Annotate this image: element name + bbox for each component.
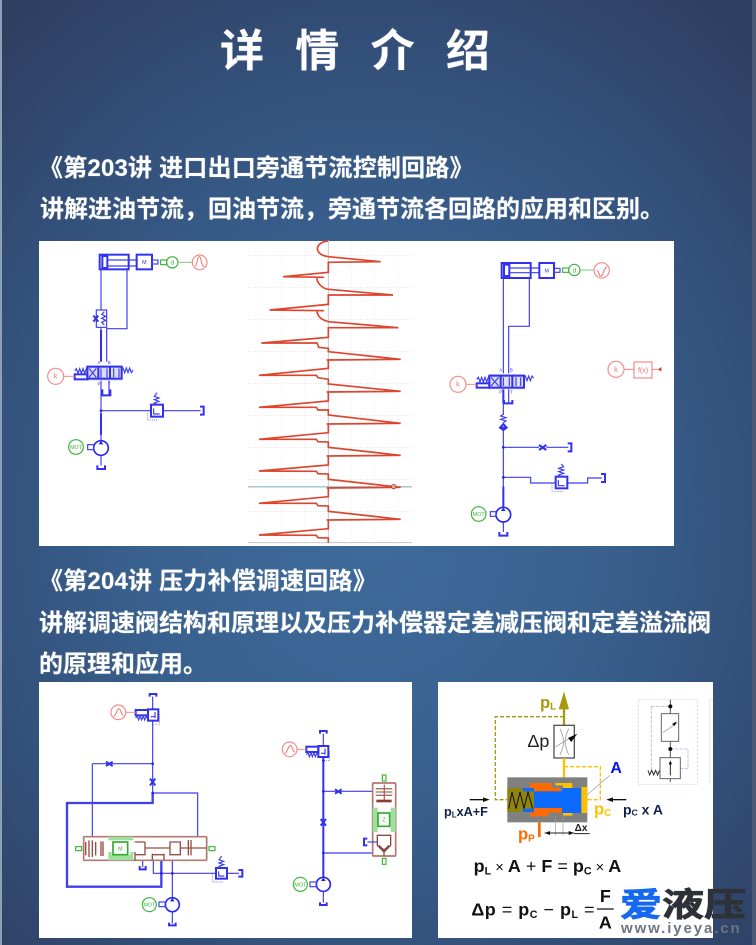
equation: pressure difference: = <box>578 899 595 919</box>
throttle and tank <box>502 443 571 451</box>
right circuit pump and motor: MOT <box>294 882 307 888</box>
watermark: site logo: www.iyeya.cn <box>620 920 742 937</box>
right circuit valve <box>282 731 330 761</box>
check and throttle block <box>93 310 107 327</box>
diagram labels: p <box>518 824 528 843</box>
directional valve: P <box>98 381 101 386</box>
equation: pressure difference: p <box>560 899 571 919</box>
sensor and signal source: d <box>170 260 174 267</box>
sensor and signal source <box>563 263 609 278</box>
right circuit throttles <box>321 789 342 826</box>
equation: force balance <box>474 856 621 878</box>
panel: compensator diagram background <box>438 682 713 938</box>
k input <box>48 368 75 384</box>
diagram labels: p <box>594 800 604 819</box>
left circuit throttles <box>106 762 155 785</box>
chart axes <box>248 240 412 543</box>
circuit: lecture 204 speed control circuits <box>67 694 396 925</box>
watermark: site logo: 爱 <box>620 886 662 923</box>
directional valve: T <box>108 381 111 386</box>
chart grid <box>248 242 412 543</box>
tanks <box>499 400 512 536</box>
diagram labels: C <box>604 808 611 819</box>
left circuit lines <box>92 697 239 924</box>
directional valve: B <box>108 360 111 365</box>
diagram labels: Δp <box>527 731 549 751</box>
pump and motor: MOT <box>473 512 485 518</box>
diagram labels: L <box>550 701 556 712</box>
right circuit pump and motor <box>293 877 330 905</box>
chart: pressure trace <box>248 240 412 543</box>
directional valve: A <box>499 368 502 373</box>
left edge strip <box>0 0 2 945</box>
left circuit junctions <box>151 762 174 875</box>
diagram labels: p <box>540 693 550 712</box>
heading: lecture 204: 《第204讲 压力补偿调速回路》 <box>39 568 377 595</box>
equation: force balance: A + F = p <box>508 856 584 876</box>
diagram labels: C <box>632 808 639 818</box>
right circuit lines <box>323 734 372 853</box>
equation: pressure difference: L <box>571 909 578 921</box>
diagram labels: x A <box>638 801 663 817</box>
directional valve: A <box>98 360 101 365</box>
hydraulic lines <box>101 269 201 465</box>
equation: pressure difference: F <box>600 886 611 906</box>
sensor and signal source: d <box>572 267 576 274</box>
equation: force balance: L <box>485 866 492 878</box>
function block <box>608 361 661 378</box>
left circuit regulator block <box>76 837 215 869</box>
delta x dimension <box>545 815 590 835</box>
sensor and signal source <box>161 255 207 270</box>
directional valve <box>477 368 534 394</box>
relief valve <box>502 464 605 491</box>
panel: lecture 204 circuit background <box>39 682 412 938</box>
relief valve <box>100 393 204 420</box>
compensator spool <box>507 775 610 837</box>
cylinder and mass <box>502 263 560 278</box>
delta x dimension: Δx <box>575 823 588 834</box>
function block: f(x) <box>638 368 648 375</box>
equation: pressure difference <box>471 886 614 933</box>
directional valve <box>75 360 133 386</box>
k input: k <box>456 380 460 389</box>
equation: pressure difference: A <box>599 913 612 933</box>
text block: lecture 204 description: 讲解调速阀结构和原理以及压力补偿器定差减压阀和定差溢流阀 <box>39 610 711 637</box>
tanks <box>97 389 110 469</box>
diagram labels: p <box>623 801 632 817</box>
right circuit junctions <box>322 759 325 854</box>
right circuit regulator block: Z <box>382 817 386 823</box>
directional valve: T <box>510 389 513 394</box>
circuit: left meter-in circuit <box>48 255 207 469</box>
left circuit pump and motor: MOT <box>143 903 156 909</box>
k input <box>450 376 477 392</box>
title: 详情介绍 <box>220 27 521 76</box>
right edge strip <box>752 0 756 945</box>
equation: force balance: × <box>592 860 608 876</box>
pump and motor: MOT <box>70 445 83 451</box>
diagram labels: p <box>444 805 452 819</box>
throttle box <box>554 725 577 758</box>
right circuit regulator block <box>364 775 396 864</box>
equation: pressure difference: − <box>538 899 560 919</box>
force arrows <box>470 797 626 802</box>
circuit: right bypass circuit <box>450 263 661 536</box>
diagram labels: xA+F <box>457 805 488 819</box>
ghost schematic <box>638 700 713 784</box>
text block: lecture 203 description: 讲解进油节流，回油节流，旁通节流各回路的应用和区别。 <box>40 196 664 223</box>
cylinder and mass: M <box>142 260 147 266</box>
yellow pilot lines <box>564 758 600 800</box>
equation: pressure difference: Δp = p <box>471 899 530 919</box>
left circuit pump and motor <box>142 898 179 925</box>
function block: k <box>614 365 618 374</box>
watermark: site logo <box>620 886 746 937</box>
cylinder and mass: M <box>544 268 549 274</box>
check valve <box>500 414 507 430</box>
equation: force balance: A <box>608 856 621 876</box>
olive output arrow and dashed pilot <box>495 691 569 800</box>
diagram labels: L <box>452 810 457 819</box>
hydraulic lines <box>503 278 602 532</box>
directional valve: P <box>499 389 502 394</box>
trace cursor marker <box>391 484 396 489</box>
text block: lecture 204 description: 的原理和应用。 <box>39 651 207 678</box>
cylinder and mass <box>100 255 158 269</box>
left circuit valve at top <box>111 694 159 724</box>
directional valve: B <box>510 368 513 373</box>
equation: force balance: × <box>491 860 508 876</box>
left circuit relief valve <box>212 856 242 882</box>
diagram: pressure compensator principle <box>444 691 713 933</box>
equation: pressure difference: C <box>530 909 538 921</box>
diagram labels: P <box>528 833 535 844</box>
watermark: site logo: 液压 <box>662 886 746 923</box>
heading: lecture 203: 《第203讲 进口出口旁通节流控制回路》 <box>39 155 474 182</box>
diagram labels <box>444 693 663 844</box>
text block: lecture 204 description <box>39 610 711 678</box>
equation: force balance: p <box>474 856 485 876</box>
panel: lecture 203 image background <box>39 241 674 546</box>
pump and motor <box>471 507 511 522</box>
diagram labels: A <box>610 760 622 777</box>
k input: k <box>54 372 58 381</box>
equation: force balance: C <box>584 866 592 878</box>
left circuit regulator block: M <box>118 847 123 853</box>
pump and motor <box>69 440 108 455</box>
trace line <box>259 241 401 543</box>
